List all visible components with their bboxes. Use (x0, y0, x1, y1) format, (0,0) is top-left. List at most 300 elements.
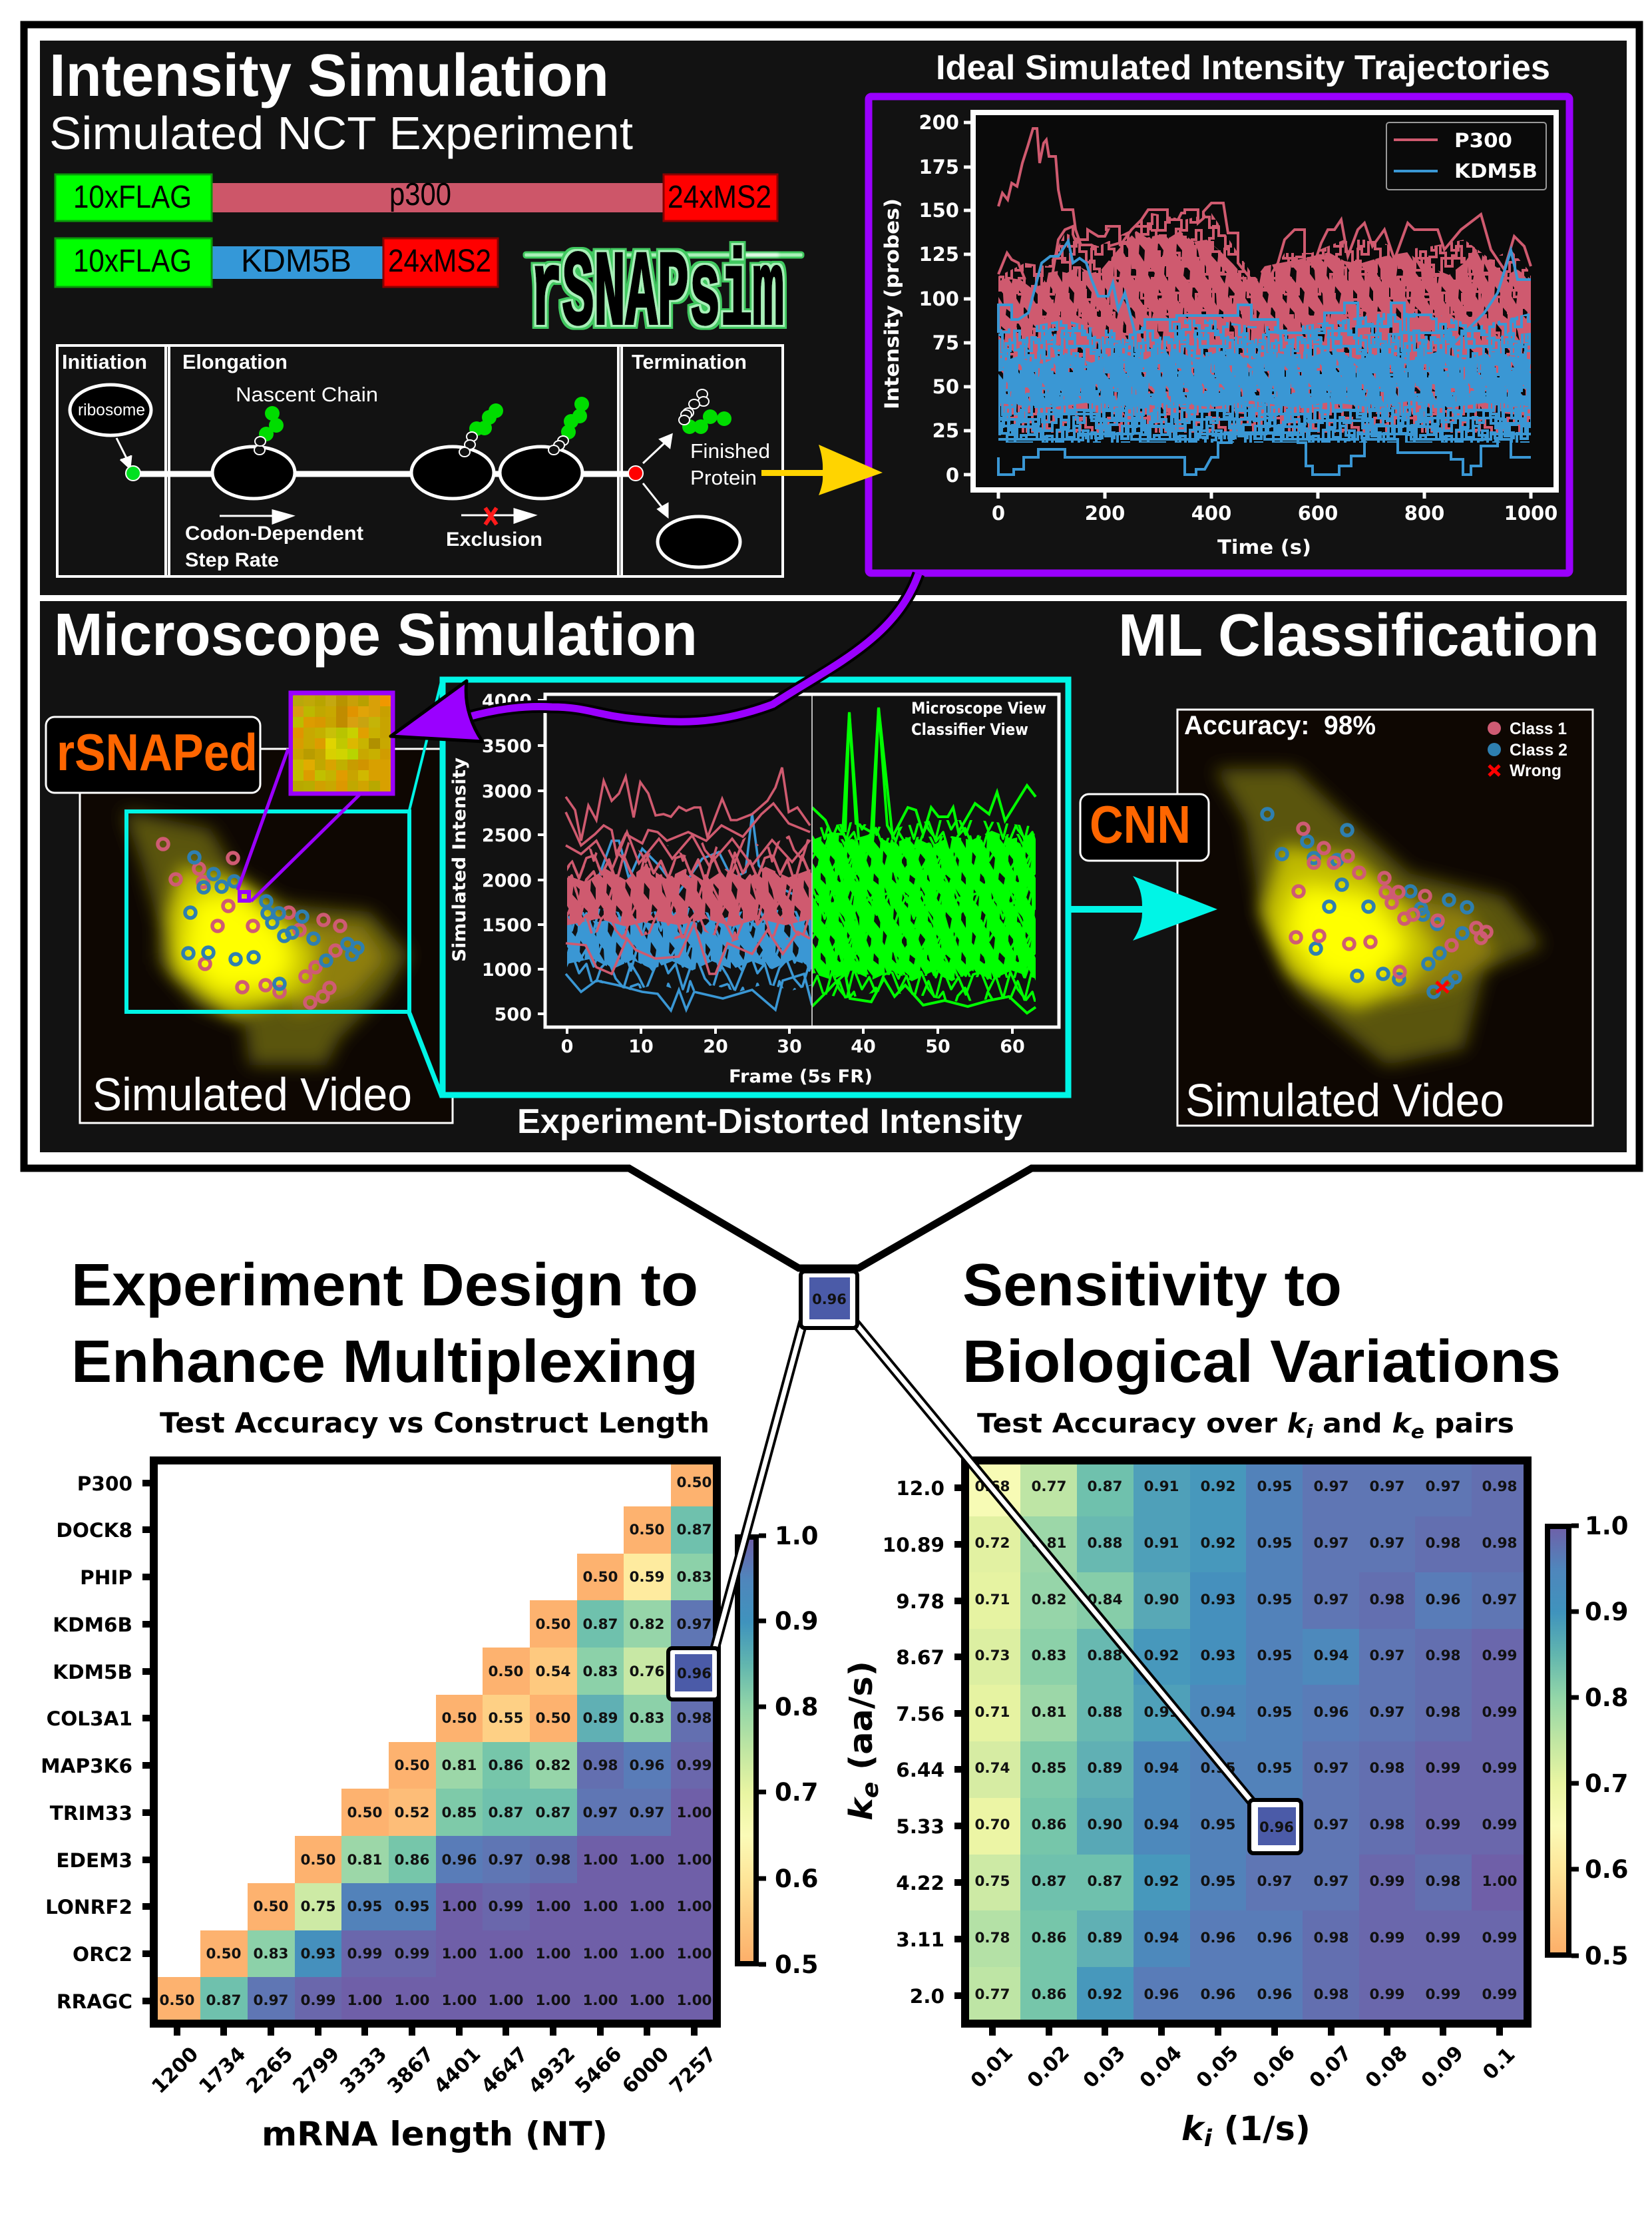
colorbar left: 0.6 (775, 1865, 819, 1893)
heatmap values: 0.94 (1143, 1817, 1179, 1833)
heatmap values: 0.81 (347, 1852, 383, 1869)
heatmap values: 0.68 (974, 1478, 1010, 1495)
logo: rSNAPsim (524, 236, 803, 356)
heatmap values: 1.00 (629, 1946, 665, 1962)
axis label: ke: e (857, 1782, 884, 1798)
gene labels: KDM6B (53, 1614, 132, 1636)
construct: KDM5B (55, 238, 498, 287)
label: Finished Protein: Protein (690, 466, 757, 489)
heatmap values: 0.93 (1200, 1592, 1236, 1608)
gene labels: LONRF2 (45, 1896, 132, 1918)
heatmap values: 0.95 (1257, 1478, 1293, 1495)
heatmap values: 0.99 (1425, 1986, 1461, 2003)
y tick labels: 1500 (482, 915, 532, 936)
y tick labels (919, 111, 959, 487)
legend: KDM5B (1454, 160, 1538, 182)
length labels: 3867 (383, 2042, 439, 2098)
panel: microscope simulation and ML classification (40, 574, 1627, 1152)
construct: KDM5B: KDM5B (241, 244, 351, 279)
heatmap values: 1.00 (582, 1898, 618, 1915)
heatmap values: 0.86 (1031, 1986, 1067, 2003)
green classifier view traces (812, 708, 1036, 1013)
heatmap values: 0.97 (1369, 1535, 1405, 1552)
construct: KDM5B: 24xMS2 (388, 244, 491, 279)
heatmap values: 1.00 (394, 1992, 430, 2009)
heatmap cells (964, 1460, 1528, 2024)
heatmap values: 0.99 (1482, 1648, 1518, 1664)
heatmap values: 0.72 (974, 1535, 1010, 1552)
axis labels (881, 198, 1311, 558)
construct: p300: 24xMS2 (668, 180, 771, 215)
chart frame (545, 694, 1059, 1027)
x tick labels: 0 (561, 1036, 573, 1057)
gene labels: RRAGC (57, 1990, 132, 2013)
detected spots class 2 (183, 852, 363, 989)
legend (1386, 122, 1546, 190)
y tick labels (482, 691, 532, 1025)
y tick labels: 1000 (482, 960, 532, 981)
heatmap values: 0.78 (974, 1930, 1010, 1946)
label: Codon-Dependent Step Rate (185, 523, 363, 571)
x tick labels: 30 (777, 1036, 802, 1057)
ki labels: 0.07 (1305, 2042, 1356, 2093)
view labels: Microscope View (911, 699, 1046, 718)
heatmap values: 0.95 (394, 1898, 430, 1915)
ke labels: 7.56 (896, 1703, 944, 1725)
classification legend: Class 2 (1510, 741, 1567, 760)
heatmap values: 0.75 (300, 1898, 336, 1915)
heatmap values: 0.50 (582, 1569, 618, 1586)
ticks (538, 700, 1012, 1034)
heatmap values: 0.50 (488, 1663, 524, 1680)
axis labels (449, 758, 873, 1087)
legend: P300 (1454, 129, 1512, 152)
heatmap values: 0.98 (1482, 1478, 1518, 1495)
heatmap values: 0.96 (1425, 1592, 1461, 1608)
heatmap values: 0.96 (1200, 1930, 1236, 1946)
ke labels: 6.44 (896, 1759, 944, 1781)
x tick labels: 10 (628, 1036, 654, 1057)
classified spots class 1 (1291, 823, 1492, 977)
heatmap values: 0.98 (535, 1852, 571, 1869)
heatmap values: 1.00 (676, 1805, 712, 1821)
heatmap values: 0.99 (1425, 1760, 1461, 1777)
ki labels: 0.03 (1079, 2042, 1130, 2093)
heatmap values: 0.71 (974, 1592, 1010, 1608)
arrow: purple curved to inset (391, 574, 919, 742)
heatmap values: 0.95 (1200, 1760, 1236, 1777)
heatmap values: 0.82 (535, 1757, 571, 1774)
heatmap values: 0.99 (1425, 1930, 1461, 1946)
heatmap values: 0.74 (974, 1760, 1010, 1777)
axis labels: Simulated Intensity (449, 758, 470, 962)
highlighted cell right (1249, 1800, 1301, 1853)
axis label: ke: k (843, 1796, 880, 1821)
title: Intensity Simulation: Intensity Simulation (49, 43, 609, 109)
heatmap values: 0.97 (1313, 1760, 1349, 1777)
heatmap values: 0.92 (1143, 1648, 1179, 1664)
view labels: Classifier View (911, 720, 1028, 739)
x tick labels: 50 (925, 1036, 950, 1057)
heatmap values: 0.99 (347, 1946, 383, 1962)
y tick labels: 100 (919, 288, 959, 310)
highlighted cell left (668, 1648, 719, 1699)
heatmap values: 1.00 (488, 1992, 524, 2009)
y tick labels: 175 (919, 156, 959, 178)
y tick labels: 500 (495, 1004, 532, 1025)
gene labels: ORC2 (73, 1943, 132, 1966)
heatmap values: 0.97 (1369, 1648, 1405, 1664)
heatmap values: 1.00 (535, 1898, 571, 1915)
colorbar right: 0.5 (1585, 1942, 1629, 1970)
heatmap values: 1.00 (535, 1946, 571, 1962)
x tick labels: 60 (1000, 1036, 1025, 1057)
heatmap values: 0.84 (1087, 1592, 1123, 1608)
heatmap values: 0.97 (488, 1852, 524, 1869)
gene labels: PHIP (80, 1566, 132, 1589)
heatmap cells (153, 1459, 718, 2024)
axis labels: Intensity (probes) (881, 198, 903, 409)
heatmap values: 0.97 (1313, 1592, 1349, 1608)
heatmap values: 0.54 (535, 1663, 571, 1680)
highlighted cell right: 0.96 (1259, 1819, 1294, 1835)
heading: Experiment Design to Enhance Multiplexing: Enhance Multiplexing (71, 1329, 698, 1395)
subtitle: Test Accuracy over ki and ke pairs: k (1392, 1409, 1412, 1439)
heatmap values: 0.73 (974, 1648, 1010, 1664)
heatmap values: 0.90 (1143, 1592, 1179, 1608)
heading: Ideal Simulated Intensity Trajectories: Ideal Simulated Intensity Trajectories (936, 49, 1550, 87)
length labels: 4932 (524, 2042, 580, 2098)
heatmap values: 0.89 (1087, 1760, 1123, 1777)
ticks (142, 1483, 694, 2036)
length labels: 3333 (335, 2042, 391, 2098)
ke labels: 12.0 (896, 1477, 944, 1500)
heatmap values: 0.97 (1482, 1592, 1518, 1608)
accuracy label: Accuracy: 98% (1184, 711, 1376, 740)
heatmap values: 0.98 (1369, 1592, 1405, 1608)
heatmap values: 0.52 (394, 1805, 430, 1821)
free ribosome (70, 385, 151, 435)
heatmap values: 1.00 (488, 1946, 524, 1962)
heatmap values: 0.50 (347, 1805, 383, 1821)
heatmap values: 0.98 (1425, 1873, 1461, 1890)
heatmap values: 0.92 (1087, 1986, 1123, 2003)
heatmap values: 0.94 (1313, 1648, 1349, 1664)
heatmap values: 0.89 (1087, 1930, 1123, 1946)
axis label: mRNA length: mRNA length (NT) (262, 2115, 608, 2153)
heatmap values: 0.98 (1425, 1648, 1461, 1664)
x tick labels: 40 (851, 1036, 876, 1057)
heatmap values: 0.55 (488, 1710, 524, 1727)
heatmap values: 0.98 (1313, 1986, 1349, 2003)
misclassified marker (1436, 982, 1448, 993)
logo: rSNAPsim: rSNAPsim (530, 236, 784, 356)
subtitle: Test Accuracy over ki and ke pairs: i (1306, 1421, 1313, 1442)
gene labels (41, 1472, 132, 2013)
heatmap values: 0.98 (676, 1710, 712, 1727)
axis labels: Frame (5s FR) (729, 1066, 873, 1087)
heatmap values: 0.50 (159, 1992, 195, 2009)
arrow: ribosome release (643, 483, 668, 517)
heatmap values: 0.96 (1143, 1986, 1179, 2003)
axis ticks (964, 122, 1531, 499)
heading: Sensitivity to Biological Variations: Biological Variations (962, 1329, 1561, 1395)
red noisy traces (566, 768, 812, 974)
axis labels: Time (s) (1217, 536, 1311, 558)
x tick labels: 0 (992, 502, 1005, 525)
nascent chains (254, 389, 731, 457)
translation process diagram (57, 345, 783, 576)
highlighted cell left: 0.96 (677, 1665, 712, 1681)
y tick labels: 2500 (482, 825, 532, 846)
small purple region marker (240, 892, 249, 901)
gene labels: MAP3K6 (41, 1755, 132, 1777)
ke labels: 8.67 (896, 1646, 944, 1669)
heatmap values: 1.00 (676, 1852, 712, 1869)
heatmap values: 0.50 (253, 1898, 289, 1915)
heatmap values: 0.98 (1482, 1535, 1518, 1552)
ke labels: 4.22 (896, 1872, 944, 1894)
heatmap values: 0.50 (300, 1852, 336, 1869)
y tick labels: 125 (919, 243, 959, 266)
heatmap values: 0.97 (1313, 1873, 1349, 1890)
heatmap values: 1.00 (1482, 1873, 1518, 1890)
heatmap values: 0.77 (974, 1986, 1010, 2003)
heatmap values: 0.86 (394, 1852, 430, 1869)
gene labels: TRIM33 (50, 1802, 132, 1825)
heatmap values: 1.00 (629, 1898, 665, 1915)
x tick labels: 800 (1404, 502, 1444, 525)
ribosomes on mRNA (212, 447, 740, 567)
heatmap values: 0.59 (629, 1569, 665, 1586)
construct: p300: 10xFLAG (73, 180, 192, 215)
axis label: ki: i (1204, 2125, 1213, 2152)
heatmap values: 0.99 (1482, 1986, 1518, 2003)
label: Codon-Dependent Step Rate: Codon-Dependent (185, 523, 363, 545)
title: Microscope Simulation: Microscope Simulation (54, 602, 698, 668)
panel: purple chart box (869, 97, 1569, 573)
cyan zoom line bottom (409, 1013, 442, 1097)
heatmap values: 0.99 (1369, 1986, 1405, 2003)
heatmap frame (965, 1460, 1528, 2024)
heatmap values: 0.86 (1031, 1930, 1067, 1946)
heatmap values: 0.97 (676, 1616, 712, 1633)
colorbar right: 0.6 (1585, 1855, 1629, 1884)
heatmap values: 1.00 (441, 1992, 477, 2009)
zoom connector left (714, 1321, 803, 1651)
length labels: 6000 (618, 2042, 674, 2098)
ticks (954, 1488, 1500, 2036)
chart frame (973, 112, 1556, 490)
ki labels: 0.02 (1023, 2042, 1074, 2093)
x tick labels (992, 502, 1557, 525)
colorbar left: 0.5 (775, 1950, 819, 1979)
heatmap values: 0.87 (206, 1992, 242, 2009)
purple zoom lines (238, 749, 359, 901)
ke labels: 5.33 (896, 1815, 944, 1838)
ke labels: 10.89 (883, 1534, 944, 1556)
gene labels: EDEM3 (56, 1849, 132, 1872)
heatmap values: 1.00 (582, 1852, 618, 1869)
heatmap values: 0.91 (1143, 1478, 1179, 1495)
ke labels: 9.78 (896, 1590, 944, 1613)
ki labels: 0.08 (1361, 2042, 1412, 2093)
blue trace band (998, 241, 1531, 475)
label: Nascent Chain: Nascent Chain (236, 383, 378, 406)
red trace band (998, 128, 1531, 433)
heatmap values: 0.97 (1425, 1478, 1461, 1495)
heading: Experiment Design to Enhance Multiplexing: Experiment Design to (71, 1252, 698, 1319)
heading: Termination: Termination (632, 350, 747, 373)
construct: KDM5B: 10xFLAG (73, 244, 192, 279)
heatmap values: 0.97 (1369, 1478, 1405, 1495)
detected spots class 1 (158, 839, 345, 1008)
heatmap values: 0.93 (1200, 1648, 1236, 1664)
y tick labels: 3000 (482, 781, 532, 802)
heatmap values: 0.82 (629, 1616, 665, 1633)
heatmap values: 0.70 (974, 1817, 1010, 1833)
heatmap values: 0.81 (1031, 1535, 1067, 1552)
outer callout frame (24, 25, 1639, 1268)
heatmap values: 0.86 (1031, 1817, 1067, 1833)
heatmap values: 0.95 (1257, 1592, 1293, 1608)
view divider (811, 693, 813, 1028)
heatmap values: 0.97 (1313, 1817, 1349, 1833)
colorbar right: 0.8 (1585, 1683, 1629, 1712)
ke labels (883, 1477, 944, 2008)
heatmap values: 0.97 (1313, 1478, 1349, 1495)
simulated video left (80, 749, 453, 1123)
axis label: ki: k (1181, 2109, 1206, 2148)
chart: ideal intensity trajectories (881, 111, 1557, 558)
heatmap values: 1.00 (535, 1992, 571, 2009)
colorbar left: 0.8 (775, 1693, 819, 1721)
length labels: 4401 (429, 2042, 485, 2098)
heatmap values: 0.96 (1200, 1986, 1236, 2003)
heatmap values: 0.76 (629, 1663, 665, 1680)
heatmap: ki and ke (843, 1460, 1528, 2152)
y tick labels: 3500 (482, 736, 532, 757)
heatmap values: 1.00 (676, 1946, 712, 1962)
x tick labels: 400 (1191, 502, 1231, 525)
heatmap values: 0.95 (1200, 1873, 1236, 1890)
heatmap values: 0.92 (1200, 1535, 1236, 1552)
heatmap values: 0.98 (1369, 1817, 1405, 1833)
heading: Elongation: Elongation (182, 350, 288, 373)
inset: pixel crop (291, 693, 393, 793)
arrow: ribosome to start (116, 438, 131, 468)
axis label: ke: (aa/s) (843, 1661, 880, 1782)
heatmap values: 0.95 (1257, 1535, 1293, 1552)
heatmap values: 0.71 (974, 1704, 1010, 1721)
x tick labels: 20 (703, 1036, 728, 1057)
construct: p300: p300 (389, 177, 451, 212)
y tick labels: 25 (932, 419, 959, 442)
arrow: protein release (643, 435, 672, 463)
heatmap values: 0.97 (1369, 1704, 1405, 1721)
heatmap values: 0.98 (1425, 1535, 1461, 1552)
ki labels: 0.1 (1478, 2043, 1520, 2085)
y tick labels: 50 (932, 375, 959, 398)
heatmap values: 0.99 (676, 1757, 712, 1774)
subtitle: Test Accuracy vs Construct Length: Test Accuracy vs Construct Length (160, 1407, 710, 1439)
heatmap values: 0.93 (300, 1946, 336, 1962)
heatmap values: 0.98 (1425, 1704, 1461, 1721)
construct: p300 (55, 174, 777, 221)
heatmap values: 0.99 (1369, 1930, 1405, 1946)
subtitle: Test Accuracy over ki and ke pairs: pairs (1424, 1409, 1514, 1439)
ki labels: 0.09 (1417, 2042, 1468, 2093)
view labels (911, 699, 1046, 739)
heatmap values: 0.99 (488, 1898, 524, 1915)
colorbar left: 0.7 (775, 1778, 819, 1807)
length labels: 5466 (570, 2042, 626, 2098)
heading: Initiation: Initiation (62, 350, 147, 373)
heatmap values: 0.50 (206, 1946, 242, 1962)
heatmap values: 0.50 (441, 1710, 477, 1727)
heatmap values: 0.99 (1369, 1873, 1405, 1890)
heading: Sensitivity to Biological Variations (962, 1252, 1561, 1395)
heatmap values: 0.94 (1143, 1760, 1179, 1777)
arrow: exclusion (461, 509, 534, 523)
length labels (147, 2042, 721, 2098)
y tick labels: 2000 (482, 871, 532, 891)
caption: Simulated Video: Simulated Video (1185, 1074, 1504, 1126)
label: rSNAPed: rSNAPed (57, 723, 258, 781)
heatmap values: 0.87 (1031, 1873, 1067, 1890)
heatmap values: 0.87 (676, 1522, 712, 1538)
heatmap values: 0.77 (1031, 1478, 1067, 1495)
heatmap values: 0.95 (1257, 1760, 1293, 1777)
x tick labels (561, 1036, 1025, 1057)
heatmap values: 0.82 (1031, 1592, 1067, 1608)
cyan zoom region (126, 811, 409, 1012)
heatmap values: 0.86 (488, 1757, 524, 1774)
subtitle: Test Accuracy over ki and ke pairs: Test Accuracy over k (977, 1409, 1305, 1439)
icon: red X (485, 508, 497, 525)
length labels: 2799 (288, 2042, 344, 2098)
classification legend: Class 1 (1510, 720, 1567, 738)
termination site (628, 466, 643, 481)
panel: intensity simulation (40, 41, 1627, 595)
y tick labels: 0 (946, 464, 959, 487)
heatmap values: 0.96 (441, 1852, 477, 1869)
heatmap values: 0.99 (1425, 1817, 1461, 1833)
heatmap values: 0.83 (629, 1710, 665, 1727)
heatmap values: 0.87 (488, 1805, 524, 1821)
caption: Simulated Video: Simulated Video (93, 1068, 412, 1120)
heatmap values: 0.87 (535, 1805, 571, 1821)
start site (126, 466, 140, 481)
heatmap values: 0.99 (1482, 1817, 1518, 1833)
colorbar right: 0.7 (1585, 1769, 1629, 1798)
heatmap values: 0.81 (441, 1757, 477, 1774)
heatmap values: 0.96 (1257, 1986, 1293, 2003)
heatmap values: 0.99 (1482, 1760, 1518, 1777)
label: Finished Protein: Finished (690, 439, 770, 463)
arrow: yellow to trajectories (761, 445, 883, 495)
heatmap values: 0.91 (1143, 1535, 1179, 1552)
heatmap values: 0.83 (582, 1663, 618, 1680)
mRNA strand (133, 471, 636, 477)
heatmap values: 1.00 (629, 1852, 665, 1869)
heatmap values: 0.95 (347, 1898, 383, 1915)
heatmap values: 1.00 (441, 1946, 477, 1962)
heatmap values: 0.50 (676, 1474, 712, 1491)
colorbar left: 1.0 (775, 1522, 819, 1550)
zoomed center cell: 0.96 (812, 1291, 847, 1307)
ki labels: 0.06 (1249, 2042, 1300, 2093)
